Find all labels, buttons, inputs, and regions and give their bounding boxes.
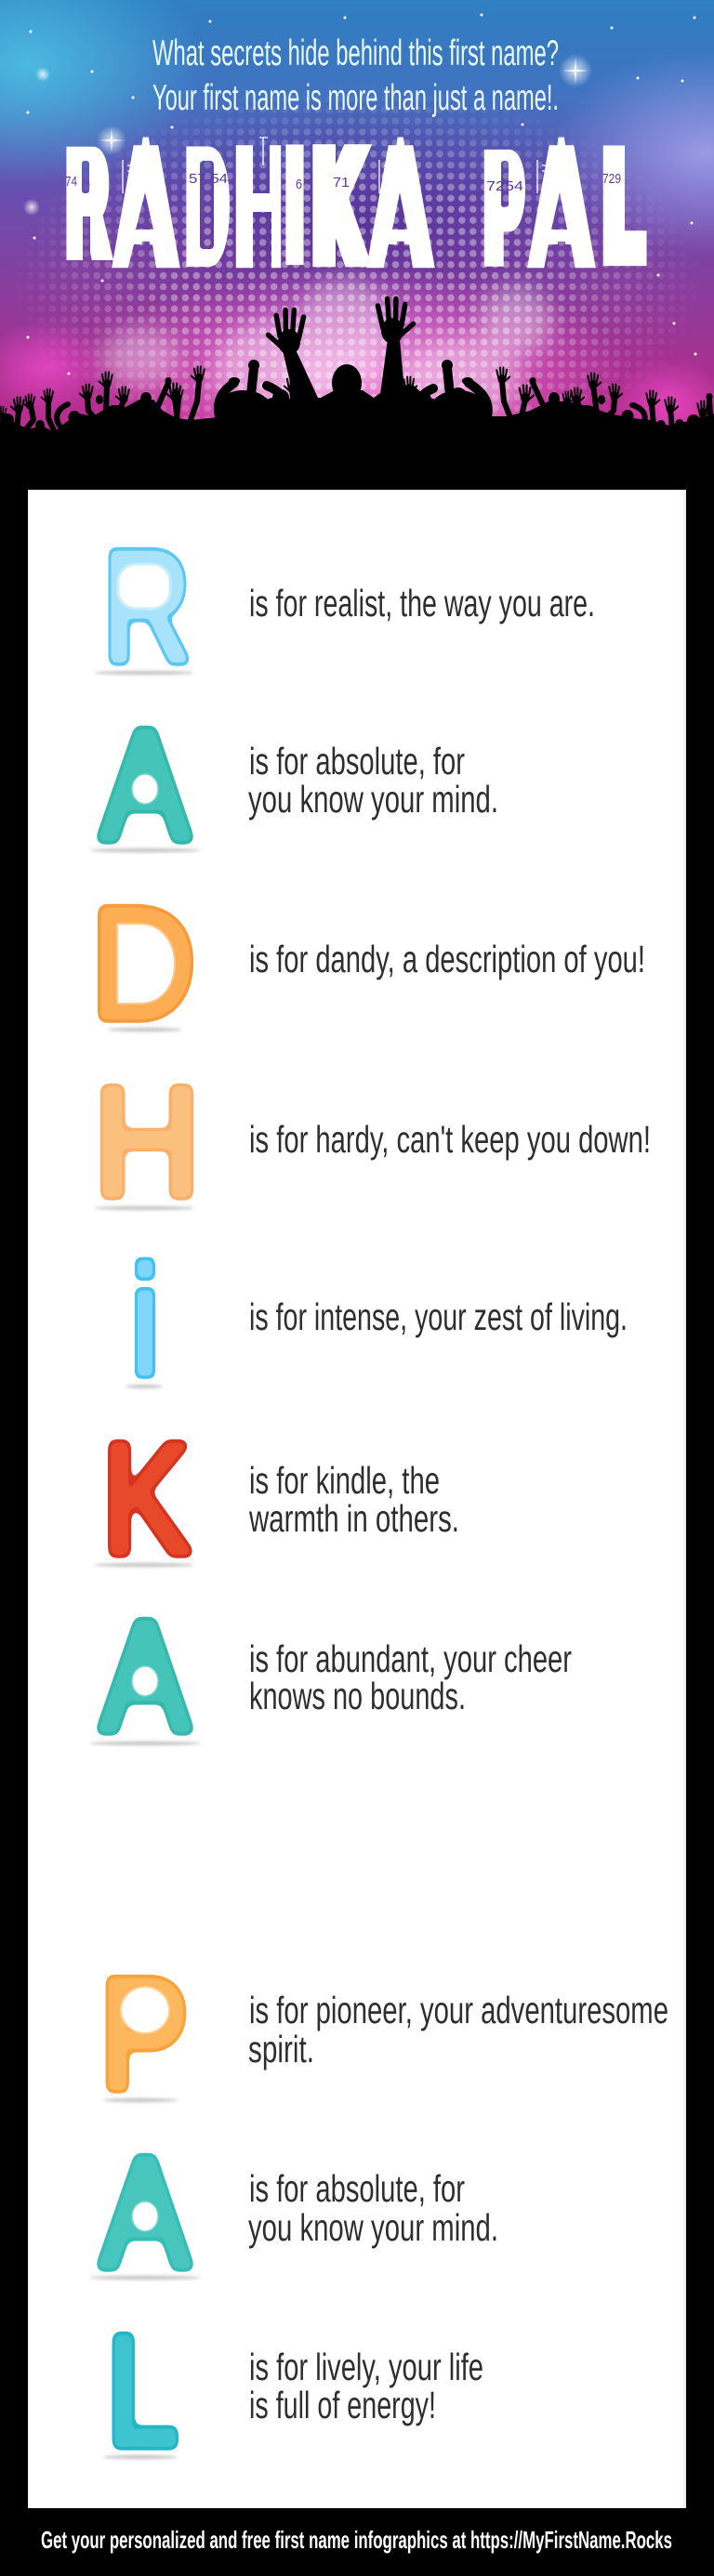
- row: A is for abundant: [89, 1591, 572, 1762]
- title: RADHIKA PAL: A: [535, 123, 588, 292]
- title: RADHIKA PAL: H: [239, 123, 278, 291]
- text: L lines: is full of energy!: [249, 2384, 436, 2426]
- title: RADHIKA PAL: L: [606, 123, 641, 288]
- row: L is for lively: [103, 2305, 483, 2476]
- text: L lines: is for lively, your life: [249, 2346, 483, 2388]
- text: A lines: is for abundant, your cheer: [249, 1637, 572, 1680]
- header banner background: [0, 0, 714, 479]
- icon: letter A: A: [101, 1591, 189, 1762]
- title: RADHIKA PAL: 57 54: [189, 171, 228, 187]
- text: A lines: [248, 2167, 498, 2249]
- icon: letter L: L: [107, 2305, 178, 2476]
- icon: letter P: P: [100, 1949, 188, 2120]
- title: RADHIKA PAL: K: [315, 122, 362, 290]
- icon: letter R: R: [104, 521, 190, 692]
- icon: letter i: i: [130, 1235, 160, 1407]
- row: R is for realist: [94, 521, 595, 692]
- icon: letter A: A: [101, 1591, 189, 1762]
- title: RADHIKA PAL: D: [189, 125, 226, 290]
- icon: letter H: H: [94, 1058, 200, 1228]
- icon: letter R: R: [104, 521, 190, 692]
- title: RADHIKA PAL: 71: [333, 175, 350, 191]
- title: RADHIKA PAL: 729: [602, 171, 621, 187]
- icon: letter i: i: [130, 1235, 160, 1407]
- white letters panel: [28, 490, 686, 2508]
- title: RADHIKA PAL: I: [288, 123, 301, 287]
- text: K lines: [248, 1459, 459, 1540]
- text: A lines: is for absolute, for: [249, 2167, 465, 2210]
- icon: letter P: P: [100, 1949, 188, 2120]
- text: A lines: knows no bounds.: [249, 1675, 466, 1717]
- title: RADHIKA PAL: P: [487, 127, 521, 288]
- text: K lines: warmth in others.: [248, 1497, 459, 1540]
- icon: letter D: D: [92, 877, 194, 1049]
- icon: letter H: H: [94, 1058, 200, 1228]
- row: i is for intense: [126, 1235, 628, 1407]
- text: P lines: [248, 1989, 668, 2070]
- text: K lines: is for kindle, the: [249, 1459, 440, 1502]
- row: K is for kindle: [94, 1413, 459, 1584]
- row: P is for pioneer: [100, 1949, 668, 2120]
- row: D is for dandy: [92, 877, 645, 1049]
- icon: letter L: L: [107, 2305, 178, 2476]
- icon: letter A: A: [101, 2127, 189, 2298]
- text: A lines: is for absolute, for: [249, 740, 465, 782]
- title: RADHIKA PAL: A: [374, 123, 428, 292]
- text: A lines: [249, 1637, 572, 1717]
- title: RADHIKA PAL: 7254: [486, 178, 523, 194]
- row: A is for absolute (surname): [89, 2127, 498, 2298]
- text: A lines: you know your mind.: [248, 2206, 498, 2249]
- title: RADHIKA PAL: 6: [296, 177, 302, 192]
- text: L lines: [249, 2346, 483, 2426]
- icon: letter A: A: [101, 2127, 189, 2298]
- title: RADHIKA PAL: 74: [65, 174, 77, 190]
- icon: letter A: A: [101, 700, 189, 871]
- crowd silhouette: [0, 299, 714, 493]
- text: P lines: spirit.: [248, 2028, 314, 2070]
- icon: letter K: K: [103, 1413, 189, 1584]
- row: H is for hardy: [94, 1058, 651, 1228]
- icon: letter A: A: [101, 700, 189, 871]
- title: RADHIKA PAL: [65, 137, 647, 268]
- text: A lines: you know your mind.: [248, 778, 498, 821]
- title: RADHIKA PAL: R: [69, 125, 106, 281]
- row: A is for absolute: [89, 700, 498, 871]
- text: A lines: [248, 740, 498, 821]
- title: RADHIKA PAL: A: [119, 123, 173, 292]
- icon: letter D: D: [92, 877, 194, 1049]
- icon: letter K: K: [103, 1413, 189, 1584]
- intro heading: [152, 33, 559, 118]
